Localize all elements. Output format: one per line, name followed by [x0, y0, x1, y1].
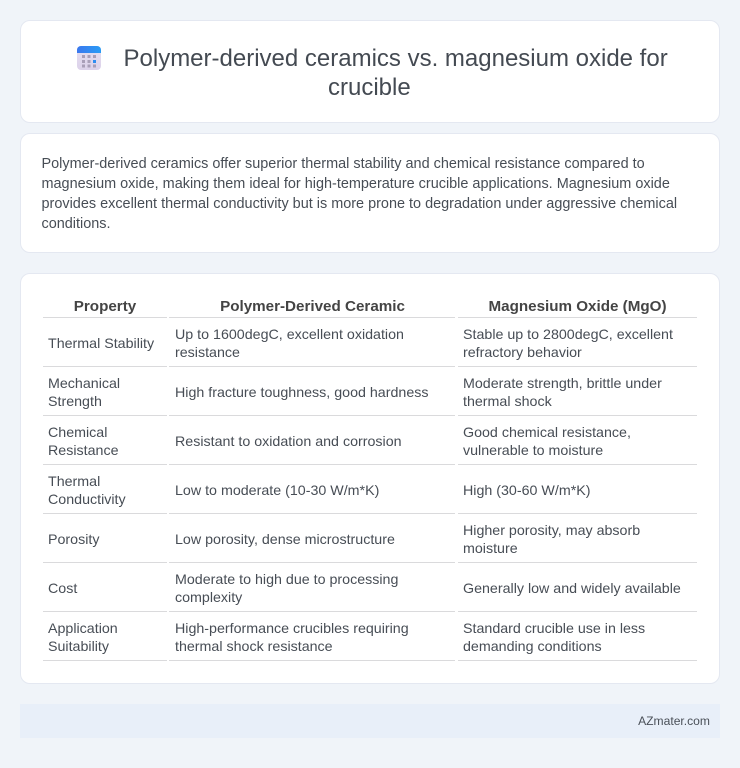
description text [42, 156, 677, 232]
row: chemical resistance: vulnerable to moisture [463, 443, 603, 459]
row: thermal stability: refractory behavior [463, 345, 582, 361]
row: porosity: Low porosity, dense microstructure [175, 532, 395, 548]
table panel [20, 273, 720, 684]
row: porosity [48, 523, 640, 557]
row: application suitability: demanding conditions [463, 639, 602, 655]
header: property: Property [74, 298, 136, 315]
title: crucible [328, 74, 411, 101]
row: chemical resistance: Good chemical resistance, [463, 425, 631, 441]
row: mechanical strength: Moderate strength, brittle under [463, 376, 662, 392]
row: thermal conductivity: Low to moderate (10-30 W/m*K) [175, 483, 379, 499]
row: mechanical strength [48, 376, 662, 410]
row: mechanical strength: High fracture toughness, good hardness [175, 385, 428, 401]
comparison table [43, 298, 697, 661]
row: chemical resistance [48, 425, 631, 459]
description text: Polymer-derived ceramics offer superior thermal stability and chemical resistance compared to [42, 156, 645, 172]
row: thermal stability: Thermal Stability [48, 336, 154, 352]
description text: provides excellent thermal conductivity but is more prone to degradation under aggressive chemical [42, 196, 677, 212]
row: cost: complexity [175, 590, 242, 606]
row: cost [48, 572, 681, 606]
row: mechanical strength: thermal shock [463, 394, 552, 410]
row: thermal stability: resistance [175, 345, 240, 361]
row: application suitability [48, 621, 645, 655]
description text: magnesium oxide, making them ideal for high-temperature crucible applications. Magnesium oxide [42, 176, 670, 192]
row: application suitability: Application [48, 621, 118, 637]
title [124, 45, 668, 101]
row: thermal stability [48, 327, 673, 361]
row: application suitability: Suitability [48, 639, 109, 655]
row: mechanical strength: Mechanical [48, 376, 120, 392]
icon: calendar [77, 46, 101, 70]
row: application suitability: High-performance crucibles requiring [175, 621, 409, 637]
row: thermal stability: Stable up to 2800degC, excellent [463, 327, 673, 343]
header: magnesium oxide: Magnesium Oxide (MgO) [488, 298, 667, 315]
header panel [20, 20, 720, 123]
row: thermal stability: Up to 1600degC, excellent oxidation [175, 327, 404, 343]
row: cost: Cost [48, 581, 77, 597]
row: thermal conductivity: High (30-60 W/m*K) [463, 483, 590, 499]
row: thermal conductivity [48, 474, 590, 508]
header: polymer-derived ceramic: Polymer-Derived Ceramic [220, 298, 405, 315]
row: cost: Generally low and widely available [463, 581, 681, 597]
description panel [20, 133, 720, 253]
row: thermal conductivity: Thermal [48, 474, 100, 490]
title: Polymer-derived ceramics vs. magnesium oxide for [124, 45, 668, 72]
row: thermal conductivity: Conductivity [48, 492, 126, 508]
row: cost: Moderate to high due to processing [175, 572, 398, 588]
row: chemical resistance: Resistance [48, 443, 118, 459]
row: porosity: moisture [463, 541, 518, 557]
row: chemical resistance: Chemical [48, 425, 107, 441]
row: mechanical strength: Strength [48, 394, 102, 410]
row: application suitability: Standard crucible use in less [463, 621, 645, 637]
footer bar [20, 704, 720, 738]
description text: conditions. [42, 216, 111, 232]
row: porosity: Higher porosity, may absorb [463, 523, 640, 539]
row: application suitability: thermal shock resistance [175, 639, 333, 655]
row: porosity: Porosity [48, 532, 99, 548]
footer text: AZmater.com [638, 714, 710, 728]
row: chemical resistance: Resistant to oxidation and corrosion [175, 434, 402, 450]
